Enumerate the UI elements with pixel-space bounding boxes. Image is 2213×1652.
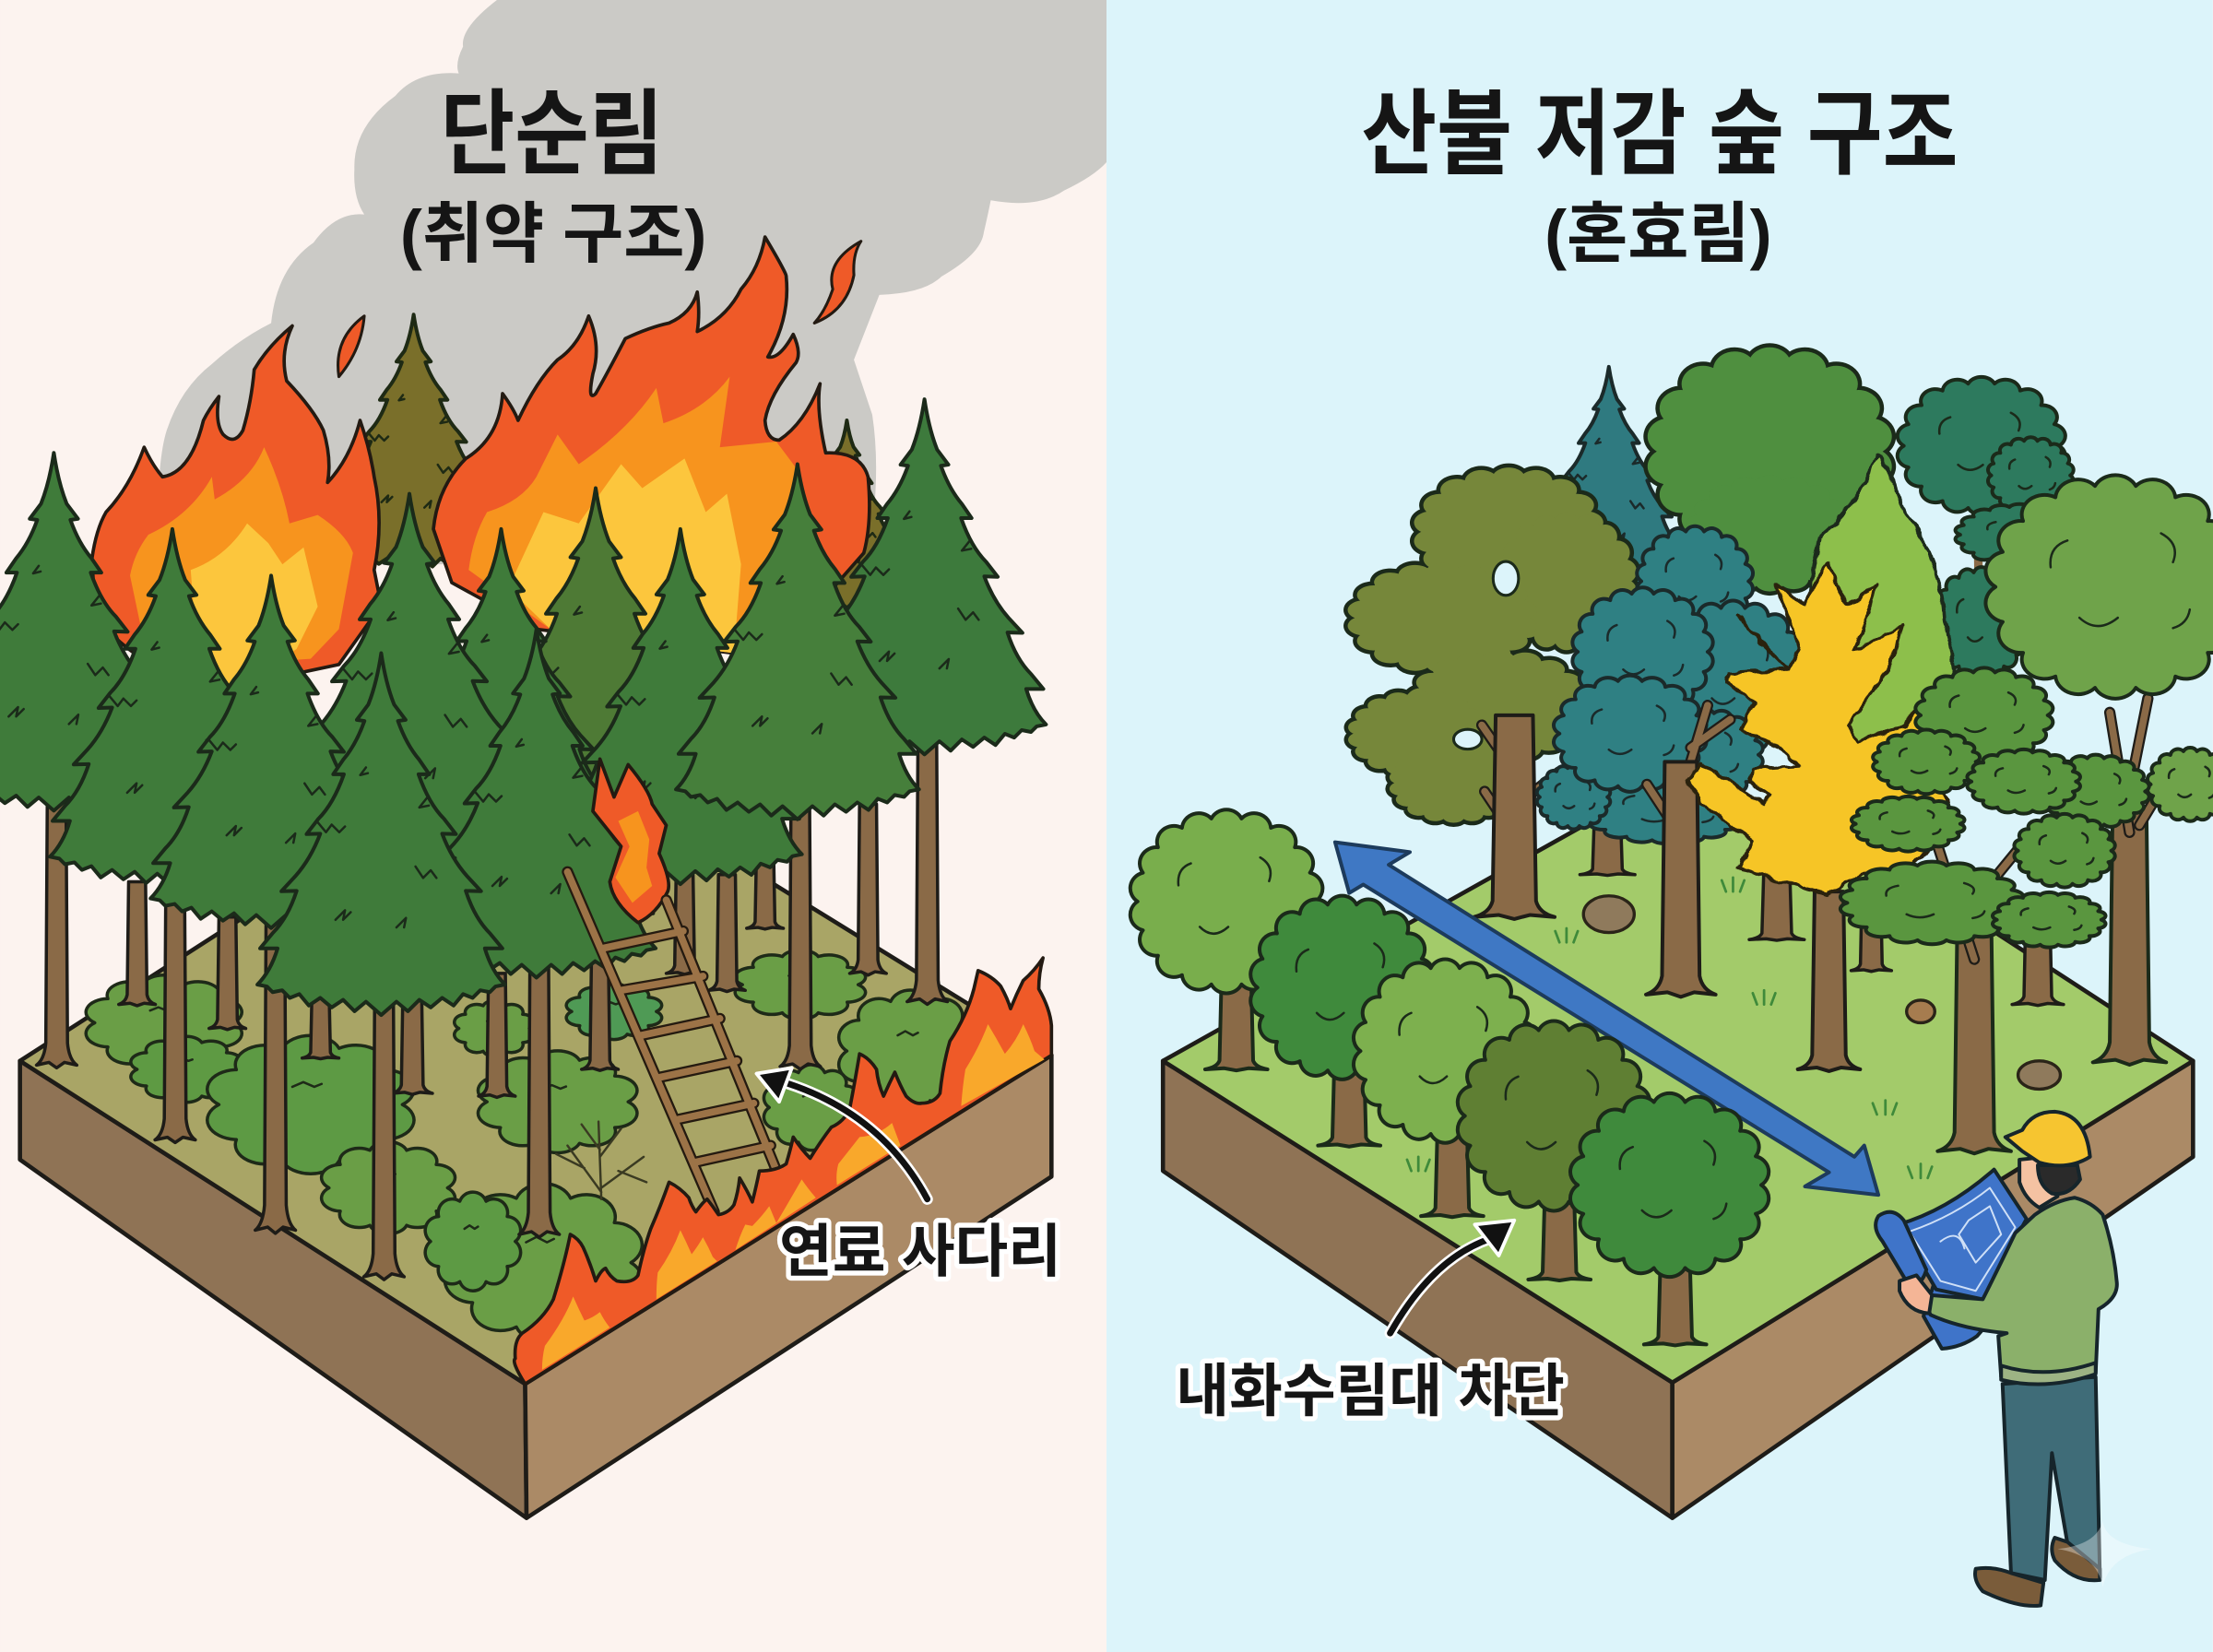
subtitle: mixed forest: (혼효림) [1544, 198, 1772, 272]
callout arrow: to firebreak [1391, 1221, 1514, 1333]
worker legs [2003, 1377, 2100, 1580]
firebreak tree 5 [1570, 1093, 1769, 1345]
right background [1106, 0, 2213, 1652]
pine trunks [37, 734, 948, 1280]
firebreak tree 2 [1250, 896, 1434, 1147]
title: monoculture: 단순림 [441, 84, 663, 187]
crown fire: left flame [92, 326, 381, 691]
worker jacket [1928, 1198, 2117, 1382]
green back canopy [1648, 348, 1892, 592]
dry twig plant [556, 1122, 646, 1199]
teal tree trunk [1646, 705, 1730, 997]
olive deciduous tree [1348, 467, 1637, 823]
worker head [2019, 1157, 2057, 1208]
ground fire along edge [515, 958, 1051, 1384]
crown fire: right flame [433, 237, 870, 654]
fuel ladder [567, 872, 775, 1212]
olive tree trunk [1473, 715, 1559, 919]
soil block and grass top [1163, 776, 2193, 1518]
callout arrow: to ladder [756, 1068, 928, 1199]
ladder flame [593, 759, 669, 923]
firebreak tree row [1130, 809, 1769, 1345]
panel: monoculture forest on fire [0, 0, 1106, 1652]
firebreak tree 3 [1354, 959, 1537, 1217]
callout label: fuel ladder: 연료 사다리 [779, 1220, 1061, 1284]
large right tree [1985, 475, 2213, 1065]
smoke cloud [158, 0, 1106, 564]
back trunks [1580, 804, 2064, 1006]
callout label: firebreak blocking: 내화수림대 차단 [1176, 1359, 1565, 1423]
firebreak tree 4 [1458, 1021, 1650, 1280]
grass tufts [1407, 878, 1932, 1178]
teal spruce [1531, 367, 1686, 595]
layered green tree [1840, 667, 2149, 1153]
soil block and forest floor [20, 734, 1051, 1518]
burnt background pines [326, 314, 911, 608]
blueprint sheet [1876, 1170, 2027, 1349]
watermark sparkle [2057, 1521, 2152, 1587]
light green conical tree [1806, 454, 1957, 819]
dark teal pine [1898, 377, 2084, 678]
worker hand [1899, 1275, 1932, 1314]
worker boots [1975, 1538, 2100, 1606]
worker reading blueprint [1876, 1112, 2117, 1606]
yellow ginkgo tree [1686, 561, 1949, 1071]
rocks and stumps [1583, 896, 2060, 1089]
firebreak double arrow [1335, 843, 1878, 1195]
title: fire-reducing forest structure: 산불 저감 숲 구조 [1361, 84, 1959, 187]
subtitle: vulnerable structure: (취약 구조) [400, 198, 706, 272]
left background [0, 0, 1106, 1652]
hard hat [2006, 1112, 2090, 1165]
flying embers [338, 242, 861, 377]
teal deciduous tree [1537, 526, 1809, 844]
worker hair [2038, 1165, 2080, 1194]
understory shrubs [86, 950, 982, 1341]
firebreak tree 1 [1130, 809, 1322, 1070]
panel: fire-resistant mixed forest [1106, 0, 2213, 1652]
jacket waistband [2001, 1363, 2096, 1385]
pine crowns [0, 399, 1046, 1015]
